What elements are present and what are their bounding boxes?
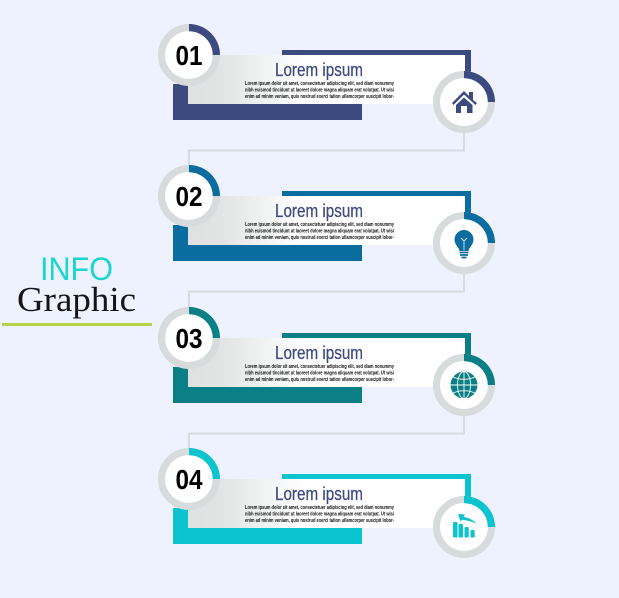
body text [245,364,394,383]
icon badge [436,354,495,412]
body text: nibh euismod tincidunt ut laoreet dolore magna aliquam erat volutpat. Ut wisi [245,228,394,234]
body text [245,505,394,524]
heading: Lorem ipsum [275,201,363,221]
title: INFO Graphic [2,251,152,326]
body text: enim ad minim veniam, quis nostrud exerci tation ullamcorper suscipit lobor- [245,518,394,524]
connector: step 3 to 4 [189,413,464,451]
body text: enim ad minim veniam, quis nostrud exerci tation ullamcorper suscipit lobor- [245,94,394,100]
body text: Lorem ipsum dolor sit amet, consectetuer adipiscing elit, sed diam nonummy [245,505,394,511]
frame [173,50,471,120]
body text: nibh euismod tincidunt ut laoreet dolore magna aliquam erat volutpat. Ut wisi [245,88,394,94]
body text: Lorem ipsum dolor sit amet, consectetuer adipiscing elit, sed diam nonummy [245,364,394,370]
body text: Lorem ipsum dolor sit amet, consectetuer adipiscing elit, sed diam nonummy [245,81,394,87]
icon: globe [450,372,478,398]
number badge: 02 [176,181,202,212]
content card [188,55,465,104]
title underline [2,323,152,326]
body text: enim ad minim veniam, quis nostrud exerci tation ullamcorper suscipit lobor- [245,235,394,241]
icon badge [436,71,495,130]
icon badge [436,496,495,554]
number badge: 03 [176,323,202,354]
body text: Lorem ipsum dolor sit amet, consectetuer adipiscing elit, sed diam nonummy [245,222,394,228]
number badge [162,448,220,506]
number badge [162,307,220,366]
icon: rising chart [453,514,476,538]
panel: step 04 [162,448,495,554]
content card [188,196,465,245]
panel: step 03 [162,307,495,412]
body text: nibh euismod tincidunt ut laoreet dolore magna aliquam erat volutpat. Ut wisi [245,512,394,518]
number badge [162,24,220,82]
connector: step 1 to 2 [189,130,464,168]
number badge: 01 [176,40,202,71]
heading: INFO: INFO [40,251,113,287]
frame [173,333,471,403]
frame [173,191,471,261]
icon badge [436,212,495,270]
frame [173,474,471,544]
content card [188,479,465,528]
panel: step 01 [162,24,495,130]
body text [245,81,394,100]
body text [245,222,394,241]
heading: Lorem ipsum [275,343,363,363]
connector: step 2 to 3 [189,271,464,310]
heading: Lorem ipsum [275,484,363,504]
number badge [162,165,220,224]
heading: Graphic: Graphic [17,280,136,319]
body text: nibh euismod tincidunt ut laoreet dolore magna aliquam erat volutpat. Ut wisi [245,370,394,376]
panel: step 02 [162,165,495,270]
icon: house [452,91,477,113]
icon: light bulb [454,230,474,258]
number badge: 04 [176,464,203,495]
heading: Lorem ipsum [275,60,363,80]
content card [188,338,465,387]
body text: enim ad minim veniam, quis nostrud exerci tation ullamcorper suscipit lobor- [245,377,394,383]
